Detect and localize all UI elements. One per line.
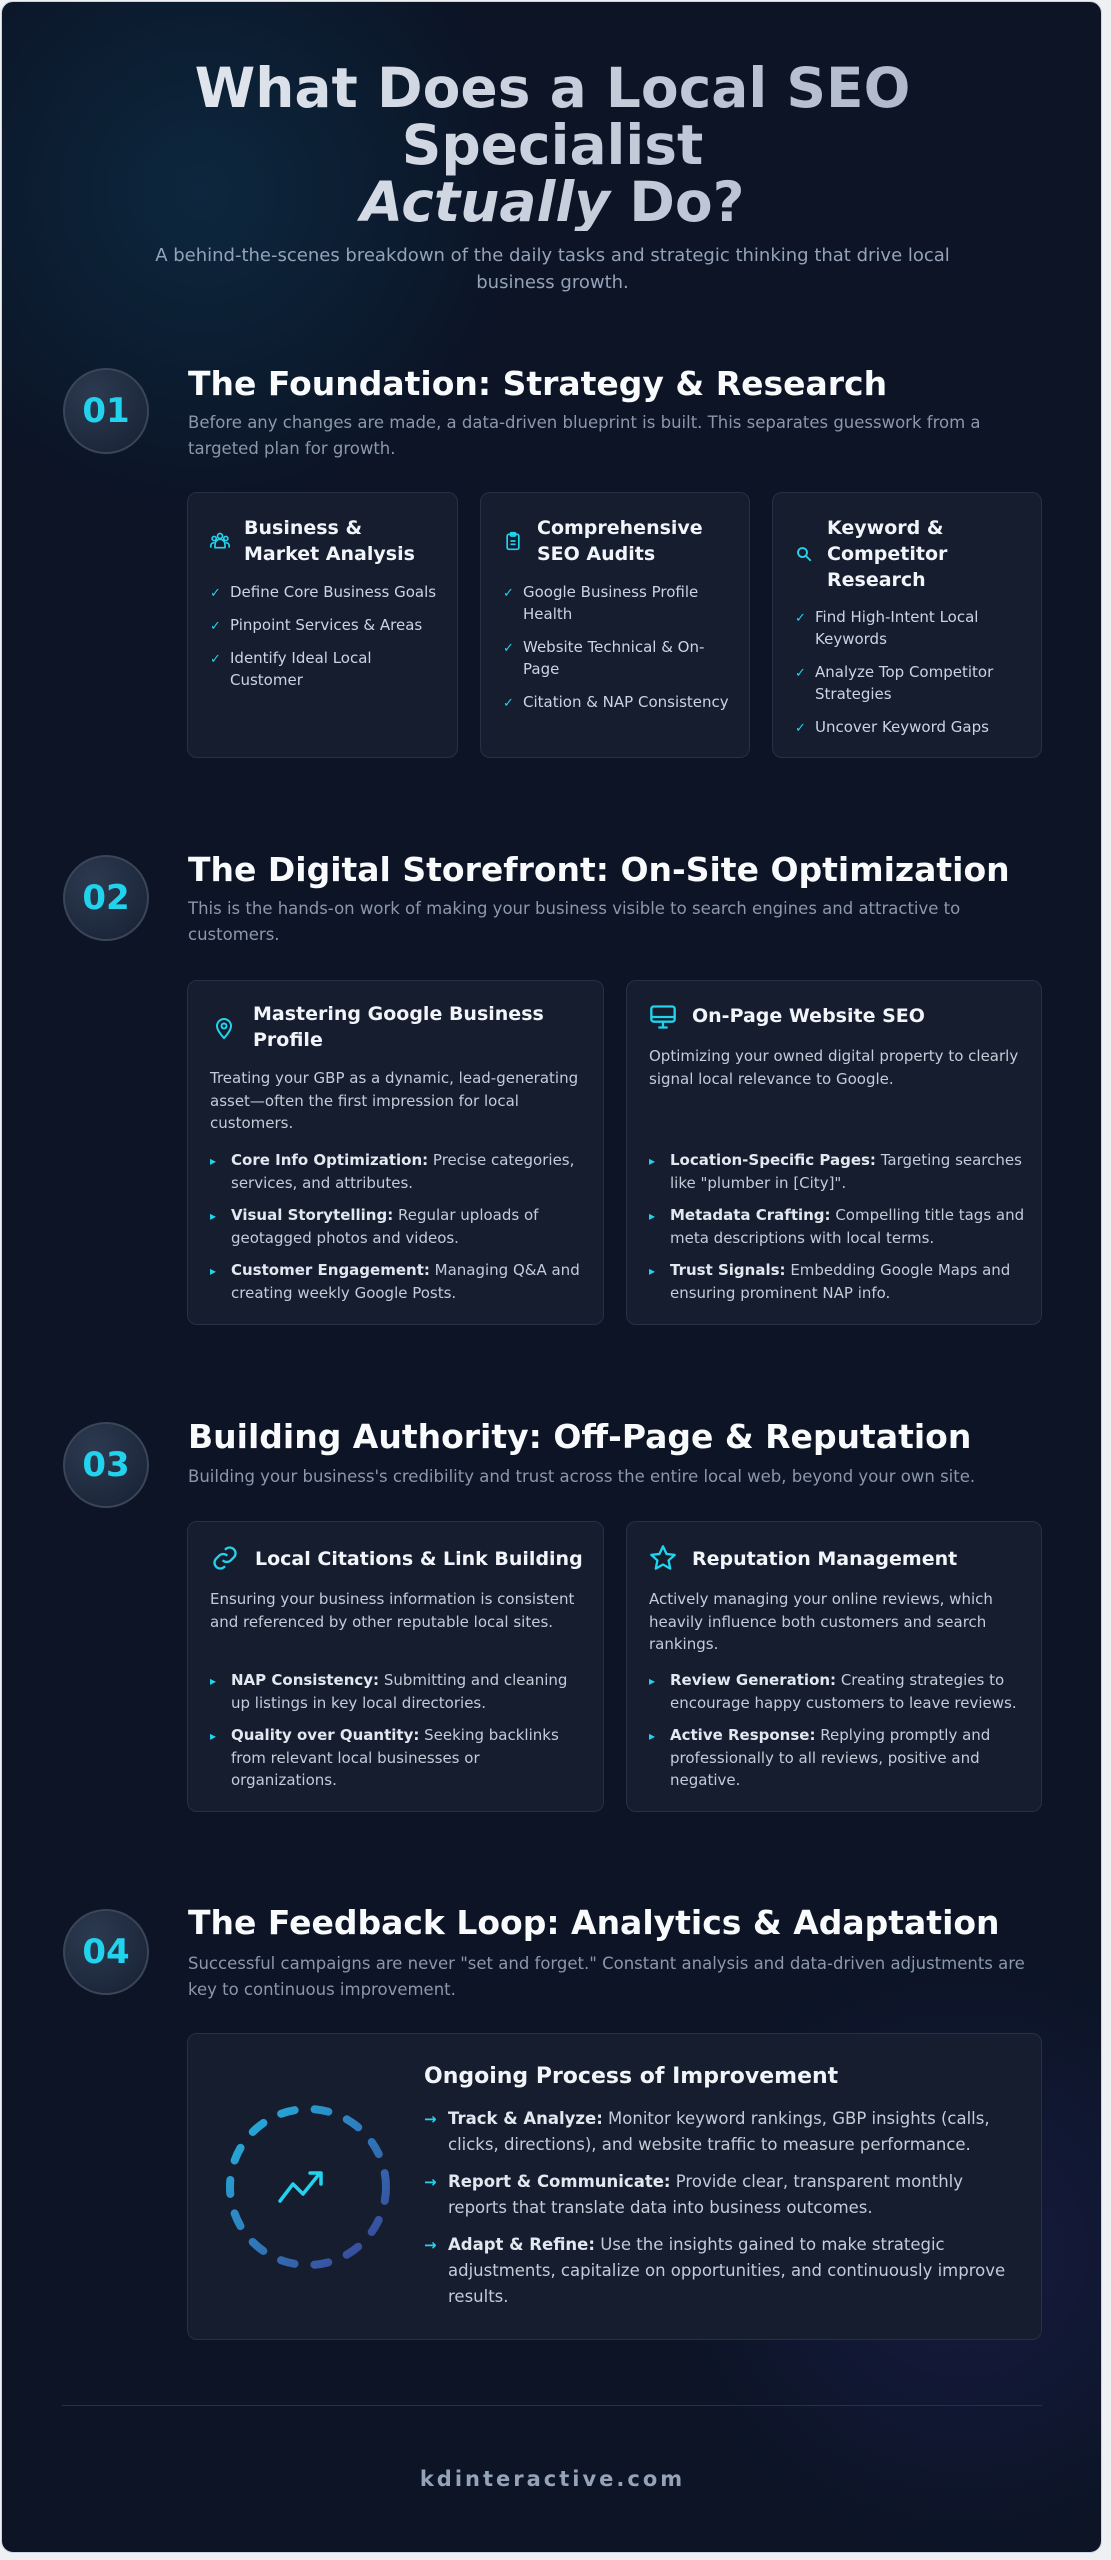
- card title: Competitor: [827, 543, 947, 565]
- card title: On-Page Website SEO: [692, 1005, 925, 1027]
- title: [2, 60, 1103, 231]
- card title: [253, 1003, 544, 1051]
- section 3 description: Building your business's credibility and trust across the entire local web, beyond your own site.: [188, 1467, 975, 1486]
- bullet list: [649, 1671, 1017, 1789]
- card description: Ensuring your business information is consistent and referenced by other reputable local sites.: [210, 1590, 574, 1630]
- arrow list: Report & Communicate: Provide clear, transparent monthly reports that translate data into business outcomes.: [448, 2172, 963, 2217]
- checklist: Google Business Profile Health: [523, 583, 698, 623]
- heading: section 3: Building Authority: Off-Page & Reputation: [188, 1417, 971, 1456]
- title: What Does a Local SEO: [195, 56, 910, 120]
- card title: Comprehensive: [537, 517, 703, 539]
- bullet list: NAP Consistency: Submitting and cleaning up listings in key local directories.: [231, 1671, 567, 1712]
- bullet list: Trust Signals: Embedding Google Maps and ensuring prominent NAP info.: [670, 1261, 1010, 1302]
- card title: SEO Audits: [537, 543, 655, 565]
- card title: Local Citations & Link Building: [255, 1548, 583, 1570]
- card title: Research: [827, 569, 926, 591]
- card: reputation management: [626, 1521, 1042, 1812]
- checklist: [212, 583, 436, 689]
- icon: clipboard: [506, 532, 520, 550]
- card title: Mastering Google Business: [253, 1003, 544, 1025]
- bullet list: [210, 1671, 567, 1789]
- title: Specialist: [402, 113, 703, 177]
- card title: Keyword &: [827, 517, 943, 539]
- bullet list: Core Info Optimization: Precise categories, services, and attributes.: [231, 1151, 574, 1192]
- arrow list: Adapt & Refine: Use the insights gained to make strategic adjustments, capitalize on opportunities, and continuously improve results.: [448, 2235, 1005, 2306]
- card: ongoing process: [187, 2033, 1042, 2340]
- checklist: Website Technical & On-Page: [523, 638, 704, 678]
- subtitle: A behind-the-scenes breakdown of the daily tasks and strategic thinking that drive local business growth.: [155, 245, 950, 293]
- bullet list: Metadata Crafting: Compelling title tags and meta descriptions with local terms.: [670, 1206, 1024, 1246]
- checklist: Uncover Keyword Gaps: [815, 718, 989, 736]
- icon: map pin: [216, 1018, 232, 1040]
- icon: search: [797, 547, 812, 562]
- card title: Business &: [244, 517, 362, 539]
- bullet list: Active Response: Replying promptly and professionally to all reviews, positive and negative.: [670, 1726, 990, 1789]
- card title: Ongoing Process of Improvement: [424, 2064, 838, 2089]
- bullet list: Quality over Quantity: Seeking backlinks from relevant local businesses or organizations.: [231, 1726, 559, 1789]
- bullet list: [210, 1151, 580, 1302]
- checklist: Identify Ideal Local Customer: [230, 649, 372, 689]
- bullet list: Visual Storytelling: Regular uploads of geotagged photos and videos.: [231, 1206, 538, 1246]
- footer: kdinteractive.com: [420, 2467, 685, 2491]
- checklist: Pinpoint Services & Areas: [230, 616, 422, 634]
- arrow list: Track & Analyze: Monitor keyword rankings, GBP insights (calls, clicks, directions), and website traffic to measure performance.: [448, 2109, 990, 2154]
- section number 04: 04: [82, 1932, 130, 1972]
- arrow list: [424, 2109, 1005, 2306]
- icon: dashed cycle with trend arrow: [226, 2105, 390, 2269]
- checklist: [505, 583, 729, 711]
- section number 03: 03: [82, 1445, 130, 1485]
- section 2 description: This is the hands-on work of making your business visible to search engines and attractive to customers.: [188, 899, 960, 944]
- checklist: [797, 608, 994, 736]
- card title: [827, 517, 948, 591]
- bullet list: Location-Specific Pages: Targeting searches like "plumber in [City]".: [670, 1151, 1022, 1192]
- checklist: Find High-Intent Local Keywords: [815, 608, 978, 648]
- bullet list: Review Generation: Creating strategies to encourage happy customers to leave reviews.: [670, 1671, 1017, 1712]
- card: on-page website SEO: [626, 980, 1042, 1325]
- icon: monitor: [650, 1005, 676, 1029]
- section number 02: [63, 855, 149, 941]
- heading: section 2: The Digital Storefront: On-Site Optimization: [188, 850, 1010, 889]
- card description: Actively managing your online reviews, which heavily influence both customers and search rankings.: [649, 1590, 993, 1653]
- card title: [537, 517, 703, 565]
- section 1 description: Before any changes are made, a data-driven blueprint is built. This separates guesswork from a targeted plan for growth.: [188, 413, 981, 458]
- icon: people: [210, 532, 230, 548]
- section number 01: 01: [82, 391, 130, 431]
- bullet list: [649, 1151, 1024, 1302]
- card title: Market Analysis: [244, 543, 415, 565]
- card: keyword research: [772, 492, 1042, 758]
- icon: star: [650, 1545, 676, 1570]
- card description: Optimizing your owned digital property to clearly signal local relevance to Google.: [649, 1047, 1018, 1088]
- card title: [244, 517, 415, 565]
- card: google business profile: [187, 980, 604, 1325]
- section number 03: [63, 1422, 149, 1508]
- icon: link: [213, 1546, 237, 1570]
- card title: Reputation Management: [692, 1548, 957, 1570]
- card title: Profile: [253, 1029, 323, 1051]
- checklist: Citation & NAP Consistency: [523, 693, 729, 711]
- heading: section 4: The Feedback Loop: Analytics & Adaptation: [188, 1903, 1000, 1942]
- card: SEO audits: [480, 492, 750, 758]
- heading: section 1: The Foundation: Strategy & Research: [188, 364, 887, 403]
- card: business & market analysis: [187, 492, 458, 758]
- section number 04: [63, 1909, 149, 1995]
- card: citations & links: [187, 1521, 604, 1812]
- section 4 description: Successful campaigns are never "set and forget." Constant analysis and data-driven adjustments are key to continuous improvement.: [188, 1954, 1025, 1999]
- section number 01: [63, 368, 149, 454]
- section number 02: 02: [82, 878, 130, 918]
- bullet list: Customer Engagement: Managing Q&A and creating weekly Google Posts.: [231, 1261, 580, 1302]
- checklist: Analyze Top Competitor Strategies: [815, 663, 993, 703]
- checklist: Define Core Business Goals: [230, 583, 436, 601]
- card description: Treating your GBP as a dynamic, lead-generating asset—often the first impression for local customers.: [210, 1069, 578, 1132]
